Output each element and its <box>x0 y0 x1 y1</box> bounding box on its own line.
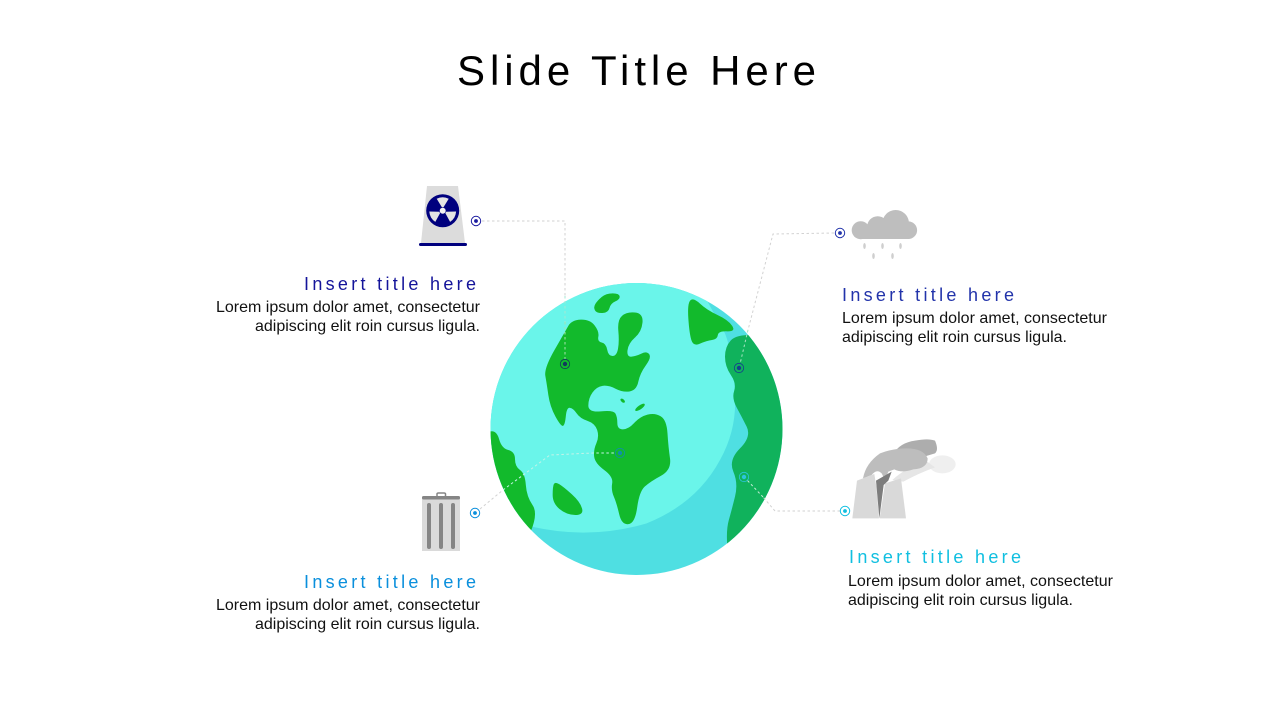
text block: top left: Insert title here <box>304 274 476 294</box>
text block: top left: Lorem ipsum dolor amet, consectetur <box>216 299 481 316</box>
title: Slide Title Here <box>457 47 816 94</box>
globe <box>490 283 782 575</box>
callout connectors <box>480 221 840 511</box>
marker: factory callout <box>840 506 850 516</box>
marker: nuclear callout <box>471 216 481 226</box>
icon: rain cloud <box>852 210 917 259</box>
text block: top right <box>842 285 1108 346</box>
marker: top-right on globe <box>734 363 744 373</box>
marker: top-left on globe <box>560 359 570 369</box>
continent: northern island <box>594 293 620 313</box>
text block: bottom left: Lorem ipsum dolor amet, consectetur <box>216 597 481 614</box>
continent: lower-left landmass <box>490 431 535 530</box>
marker: waste callout <box>470 508 480 518</box>
continent: eastern limb <box>725 335 782 544</box>
continent: tiny islands <box>620 398 645 411</box>
text block: top left: adipiscing elit roin cursus ligula. <box>255 318 480 335</box>
continent: the Americas <box>545 312 670 524</box>
text block: bottom right: Lorem ipsum dolor amet, consectetur <box>848 573 1114 590</box>
icon: trash bin <box>422 493 460 551</box>
text block: bottom left: adipiscing elit roin cursus ligula. <box>255 616 480 633</box>
marker: bottom-left on globe <box>615 448 625 458</box>
continent: north-east landmass <box>688 299 733 345</box>
text block: bottom right: adipiscing elit roin cursus ligula. <box>848 592 1073 609</box>
continent: southern island <box>553 483 582 515</box>
marker: rain callout <box>835 228 845 238</box>
globe ocean light <box>490 283 735 532</box>
text block: bottom right: Insert title here <box>849 547 1021 567</box>
text block: bottom left: Insert title here <box>304 572 476 592</box>
text block: bottom left <box>216 572 481 633</box>
globe ocean shadow <box>490 283 782 575</box>
text block: top right: Insert title here <box>842 285 1014 305</box>
icon: factory with smoke <box>852 439 956 518</box>
icon: nuclear cooling tower <box>419 186 467 246</box>
text block: top left <box>216 274 481 335</box>
text block: bottom right <box>848 547 1114 609</box>
text block: top right: Lorem ipsum dolor amet, consectetur <box>842 310 1108 327</box>
marker: bottom-right on globe <box>739 472 749 482</box>
text block: top right: adipiscing elit roin cursus ligula. <box>842 329 1067 346</box>
